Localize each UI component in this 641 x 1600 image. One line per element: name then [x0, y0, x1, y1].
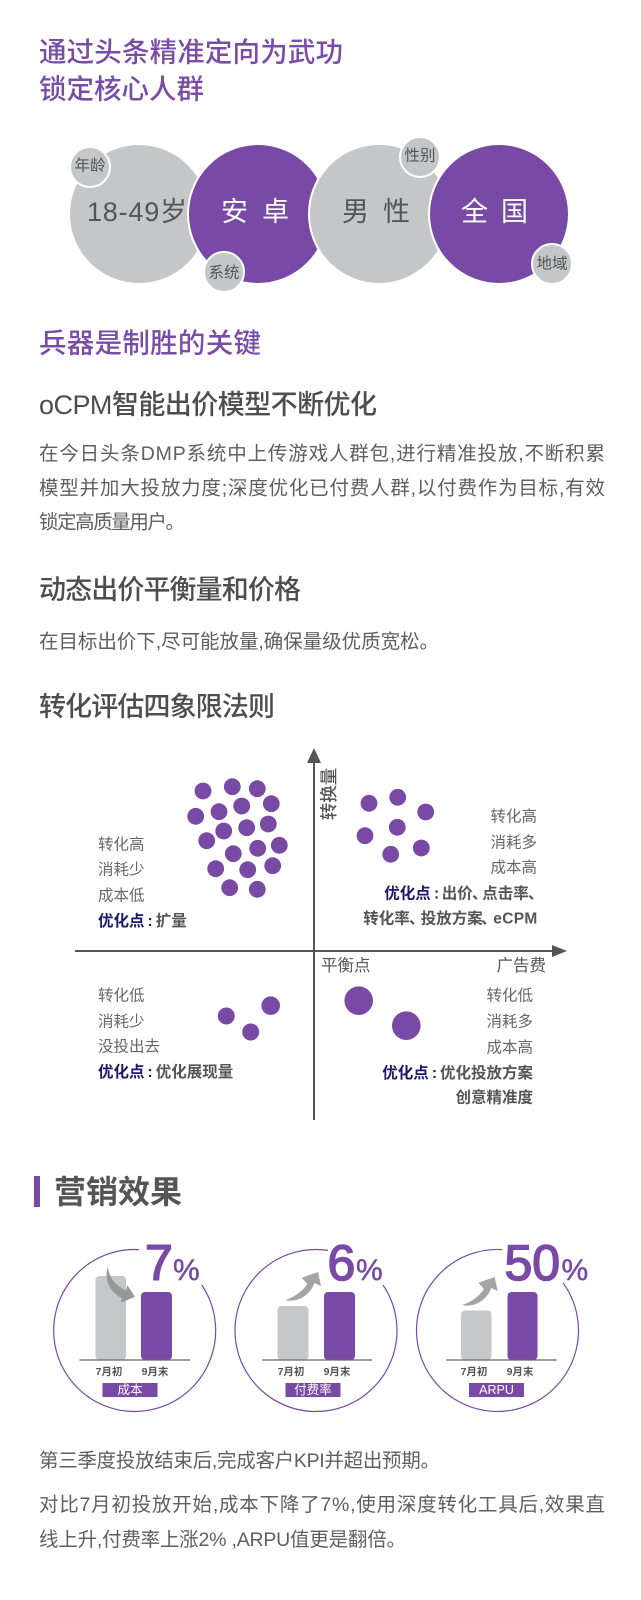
- panel: cost result: [54, 1235, 216, 1411]
- panel: cost result: 7月初: [96, 1365, 122, 1378]
- text: top right quadrant: 成本高: [490, 858, 537, 876]
- text: top right quadrant: 投放方案: [421, 908, 483, 928]
- badge: region: 地域: [536, 254, 568, 272]
- icon: down arrow: [107, 1267, 135, 1303]
- title: 通过头条精准定向为武功: [39, 36, 343, 68]
- quadrant chart: [75, 748, 567, 1120]
- text: top right quadrant: 、: [409, 910, 425, 928]
- audience targeting circles: [70, 137, 572, 292]
- icon: up arrow: [462, 1277, 498, 1306]
- badge: age: 年龄: [74, 156, 106, 174]
- text: top right quadrant: [363, 808, 544, 928]
- badge: region: [532, 244, 572, 284]
- text block: results summary: 第三季度投放结束后,完成客户KPI并超出预期。: [39, 1450, 440, 1472]
- panel: ARPU result: %: [562, 1254, 588, 1287]
- text: bottom right quadrant: 创意精准度: [455, 1088, 533, 1106]
- panel: pay rate result: 9月末: [324, 1365, 351, 1378]
- text: top left quadrant: 转化高: [98, 836, 145, 854]
- panel: cost result: %: [173, 1254, 200, 1287]
- circle: gender: 男性: [342, 197, 410, 227]
- heading: weapons: 兵器是制胜的关键: [39, 328, 261, 358]
- panel: ARPU result: [417, 1235, 588, 1411]
- text: top left quadrant: [98, 836, 187, 930]
- text: bottom left quadrant: 没投出去: [98, 1038, 160, 1056]
- text: bottom right quadrant: 成本高: [486, 1038, 533, 1056]
- badge: system: 系统: [208, 264, 240, 282]
- text block: oCPM description: 锁定高质量用户。: [39, 512, 185, 534]
- heading: quadrant rule: 转化评估四象限法则: [39, 692, 275, 722]
- dots: bottom right quadrant: [344, 986, 421, 1040]
- text: top right quadrant: 转化率: [363, 908, 410, 928]
- axis label: conversions: 转换量: [319, 768, 339, 820]
- circle: age: 18-49岁: [87, 197, 187, 227]
- text: top right quadrant: 点击率: [482, 884, 529, 902]
- circle: gender: [309, 144, 449, 284]
- text block: results summary: 对比7月初投放开始,成本下降了7%,使用深度转化工具后,效果直: [39, 1494, 605, 1516]
- dots: top right quadrant: [357, 789, 434, 863]
- panel: ARPU result: ARPU: [479, 1383, 514, 1397]
- chart axes: [75, 748, 567, 1120]
- panel: pay rate result: 6: [328, 1235, 355, 1291]
- badge: gender: 性别: [404, 146, 436, 164]
- axis label: balance point: 平衡点: [321, 956, 370, 975]
- circle: region: [429, 144, 569, 284]
- heading: marketing results: 营销效果: [54, 1174, 182, 1210]
- text block: oCPM description: 在今日头条DMP系统中上传游戏人群包,进行精准投放,不断积累: [39, 443, 605, 465]
- text: top left quadrant: 消耗少: [98, 860, 145, 878]
- title: [39, 36, 343, 104]
- text: bottom right quadrant: 消耗多: [486, 1012, 533, 1030]
- text: top right quadrant: 、: [481, 910, 497, 928]
- icon: up arrow: [285, 1272, 321, 1301]
- text: bottom left quadrant: 转化低: [98, 986, 145, 1004]
- circle: system: 安卓: [221, 197, 289, 227]
- circle: region: 全国: [461, 197, 528, 227]
- panel: cost result: 9月末: [142, 1365, 169, 1378]
- text: bottom right quadrant: 优化点:优化投放方案: [382, 1062, 533, 1082]
- title: 锁定核心人群: [39, 74, 204, 104]
- text block: results summary: 线上升,付费率上涨2% ,ARPU值更是翻倍。: [39, 1529, 406, 1551]
- text: top right quadrant: 转化高: [490, 808, 537, 826]
- panel: cost result: 成本: [117, 1383, 143, 1397]
- heading: dynamic bidding: 动态出价平衡量和价格: [39, 575, 301, 605]
- text: bottom right quadrant: 转化低: [486, 986, 533, 1004]
- text: bottom left quadrant: [98, 986, 233, 1080]
- panel: ARPU result: 50: [504, 1235, 560, 1291]
- circle: system: [188, 144, 328, 284]
- text: bottom right quadrant: [382, 986, 533, 1106]
- text block: oCPM description: [39, 443, 605, 534]
- panel: pay rate result: 7月初: [278, 1365, 304, 1378]
- panel: pay rate result: %: [356, 1254, 383, 1287]
- dots: top left quadrant: [187, 778, 288, 898]
- heading: oCPM: oCPM智能出价模型不断优化: [39, 390, 377, 420]
- text block: dynamic bidding description: 在目标出价下,尽可能放量,确保量级优质宽松。: [39, 631, 439, 653]
- text: top left quadrant: 成本低: [98, 886, 145, 904]
- badge: system: [204, 252, 244, 292]
- text: top right quadrant: :: [434, 886, 439, 902]
- badge: gender: [400, 137, 440, 177]
- panel: pay rate result: 付费率: [294, 1382, 332, 1397]
- text: top right quadrant: 、: [528, 886, 544, 902]
- panel: ARPU result: 7月初: [461, 1365, 487, 1378]
- text: bottom left quadrant: 消耗少: [98, 1012, 145, 1030]
- panel: ARPU result: 9月末: [507, 1365, 534, 1378]
- dots: bottom left quadrant: [218, 996, 280, 1040]
- panel: cost result: 7: [145, 1235, 173, 1291]
- badge: age: [70, 147, 110, 187]
- axis label: ad spend: 广告费: [496, 956, 546, 975]
- circle: age: [70, 145, 208, 283]
- text: top right quadrant: 优化点: [384, 884, 431, 902]
- text: top right quadrant: eCPM: [493, 910, 537, 928]
- text: top left quadrant: 优化点:扩量: [98, 910, 187, 930]
- text: top right quadrant: 、: [472, 886, 488, 902]
- text: top right quadrant: 消耗多: [490, 834, 537, 852]
- text: top right quadrant: 出价: [442, 884, 473, 902]
- text: bottom left quadrant: 优化点:优化展现量: [98, 1062, 233, 1080]
- panel: pay rate result: [235, 1235, 397, 1412]
- text block: oCPM description: 模型并加大投放力度;深度优化已付费人群,以付费作为目标,有效: [39, 478, 605, 500]
- text block: results summary: [39, 1450, 605, 1551]
